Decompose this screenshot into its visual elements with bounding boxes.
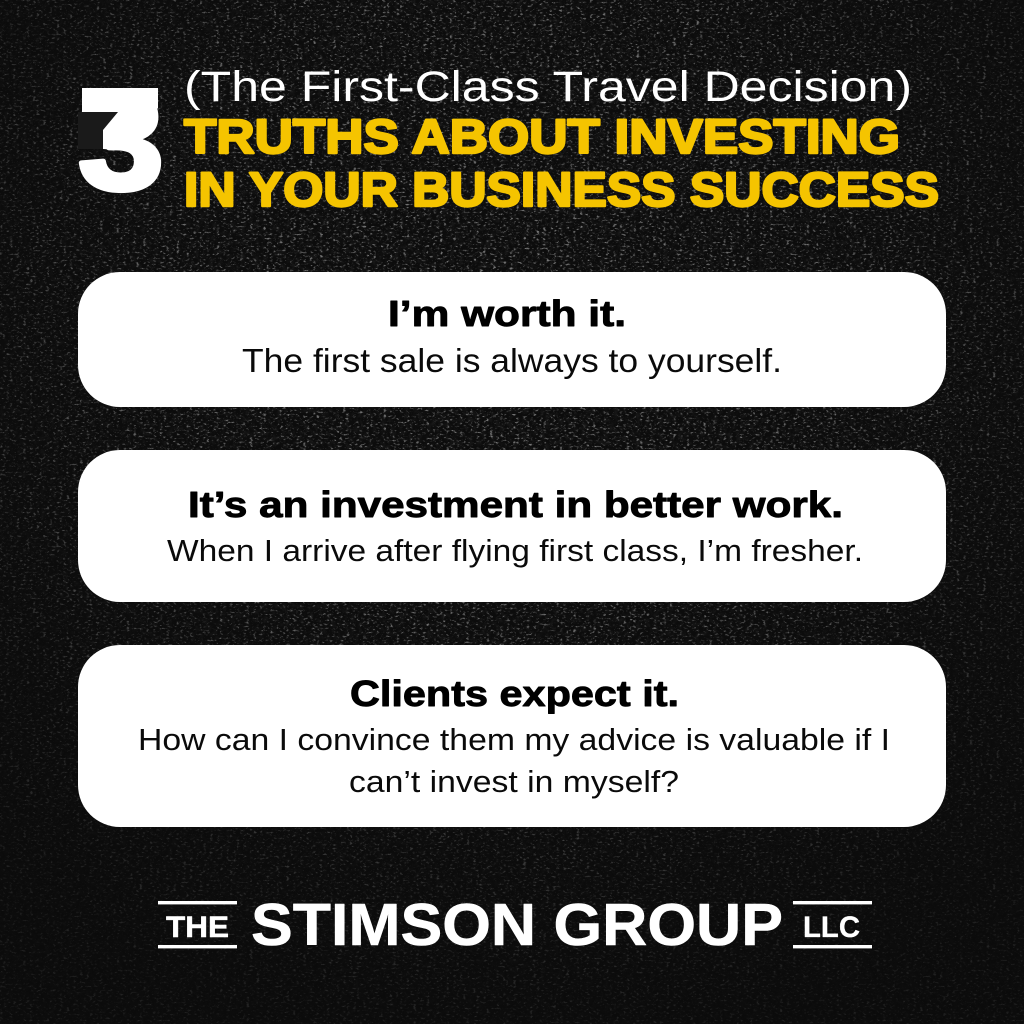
truth 3 body: How can I convince them my advice is valuable if I <box>138 723 890 757</box>
truth 1 heading: I’m worth it. <box>388 293 626 334</box>
subtitle: (The First-Class Travel Decision) <box>184 63 912 111</box>
big numeral 3: 3 <box>78 62 164 219</box>
truth 3 body: can’t invest in myself? <box>349 765 679 799</box>
panel: truth 1 <box>78 272 946 407</box>
truth 2 body: When I arrive after flying first class, I’m fresher. <box>167 534 863 568</box>
title block <box>78 62 939 219</box>
truth 3 heading: Clients expect it. <box>350 673 679 714</box>
yellow heading: IN YOUR BUSINESS SUCCESS <box>184 164 939 217</box>
panel: truth 2 <box>78 450 946 602</box>
yellow heading: TRUTHS ABOUT INVESTING <box>184 111 900 164</box>
logo: The Stimson Group LLC: STIMSON GROUP <box>251 892 783 958</box>
truth 1 body: The first sale is always to yourself. <box>242 342 782 379</box>
logo: The Stimson Group LLC: THE <box>166 911 229 944</box>
truth 3 body <box>138 723 890 799</box>
panel: truth 3 <box>78 645 946 827</box>
truth 2 heading: It’s an investment in better work. <box>188 484 843 525</box>
logo: The Stimson Group LLC: LLC <box>803 911 860 944</box>
yellow heading <box>184 111 939 217</box>
